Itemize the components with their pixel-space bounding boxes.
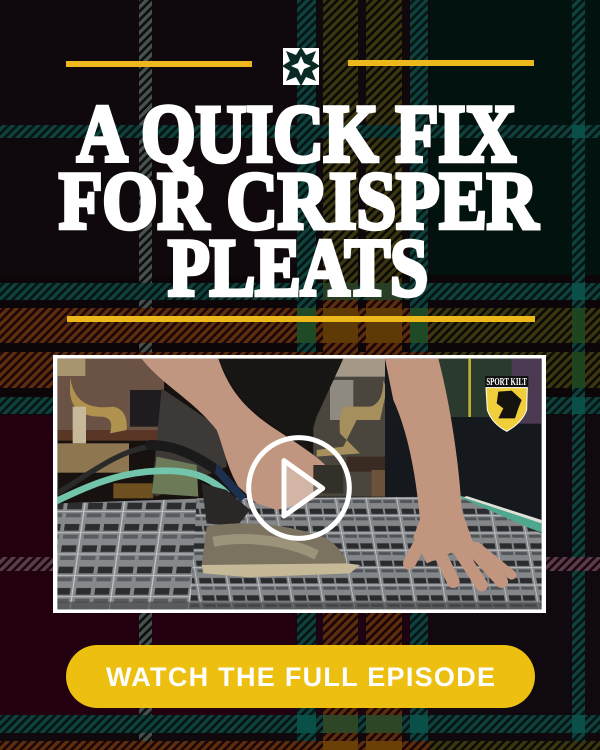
sport kilt logo: SPORT KILT [486, 377, 527, 388]
title: PLEATS [168, 222, 428, 313]
title [59, 88, 539, 313]
grey apron and dark shirt [152, 359, 343, 497]
workshop background [57, 359, 542, 609]
icon: star logo badge [282, 47, 320, 86]
title: A QUICK FIX [77, 88, 516, 179]
right arm and hand [385, 359, 512, 585]
cutting table with plaid fabric [57, 496, 542, 609]
hoses [57, 445, 227, 501]
sport kilt logo [485, 376, 528, 431]
title: FOR CRISPER [59, 155, 539, 246]
divider: top right gold line [348, 60, 534, 66]
divider: gold line below title [67, 316, 535, 322]
video thumbnail panel [53, 355, 546, 613]
steam iron [202, 463, 360, 577]
divider: top left gold line [66, 61, 252, 67]
left arm and hand [142, 359, 327, 510]
play button [249, 438, 349, 538]
button: watch the full episode: WATCH THE FULL EPISODE [106, 662, 495, 692]
button: watch the full episode [66, 645, 535, 708]
